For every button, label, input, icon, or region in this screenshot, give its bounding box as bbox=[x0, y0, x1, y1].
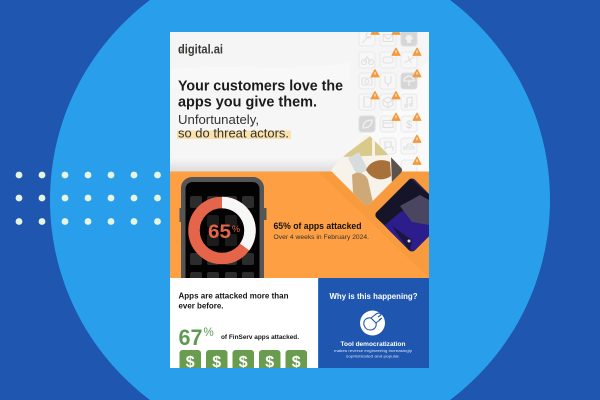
logo: digital.ai bbox=[178, 42, 223, 56]
heading: ever before. bbox=[178, 300, 224, 310]
title: Your customers love the bbox=[178, 78, 343, 94]
panel: 65 percent stat bbox=[170, 172, 429, 278]
dollar icons: $ bbox=[212, 354, 221, 371]
tool democratization text: Tool democratization bbox=[340, 341, 406, 348]
67 percent bbox=[179, 328, 299, 345]
tool democratization text: makes reverse engineering increasingly bbox=[334, 348, 412, 353]
dollar icons: $ bbox=[239, 354, 248, 371]
heading: Why is this happening? bbox=[330, 292, 418, 301]
donut chart: 65 bbox=[208, 221, 231, 243]
title: apps you give them. bbox=[178, 94, 317, 110]
67 percent: 67 bbox=[178, 325, 202, 350]
photo: hand holding phone bbox=[332, 135, 402, 206]
panel: header bbox=[170, 27, 429, 176]
icon grid bbox=[359, 30, 417, 176]
tool democratization text: sophisticated and popular. bbox=[346, 354, 400, 358]
subtitle bbox=[177, 114, 291, 139]
infographic page bbox=[170, 27, 430, 374]
tool democratization text bbox=[334, 341, 412, 358]
panel: why is this happening bbox=[318, 278, 429, 368]
dollar icons bbox=[180, 350, 307, 368]
subtitle: so do threat actors. bbox=[178, 126, 289, 140]
donut chart bbox=[194, 202, 250, 258]
heading: Apps are attacked more than bbox=[178, 290, 288, 300]
dollar icons: $ bbox=[265, 354, 274, 371]
subtitle: Unfortunately, bbox=[178, 113, 259, 127]
stat text: Over 4 weeks in February 2024. bbox=[274, 234, 369, 241]
panel: attacks stat bbox=[170, 278, 318, 374]
dot grid bbox=[16, 172, 161, 225]
photo: dark hooded figure bbox=[376, 178, 429, 252]
phone bbox=[180, 177, 266, 278]
stat text bbox=[274, 222, 368, 240]
icon: plug bbox=[360, 310, 385, 336]
warning triangles bbox=[371, 27, 421, 164]
67 percent: % bbox=[204, 327, 214, 339]
icon grid: $ bbox=[406, 119, 412, 131]
67 percent: of FinServ apps attacked. bbox=[221, 334, 299, 341]
donut chart: % bbox=[232, 224, 240, 234]
dollar icons: $ bbox=[186, 354, 195, 371]
dollar icons: $ bbox=[292, 354, 301, 371]
stat text: 65% of apps attacked bbox=[274, 221, 362, 231]
